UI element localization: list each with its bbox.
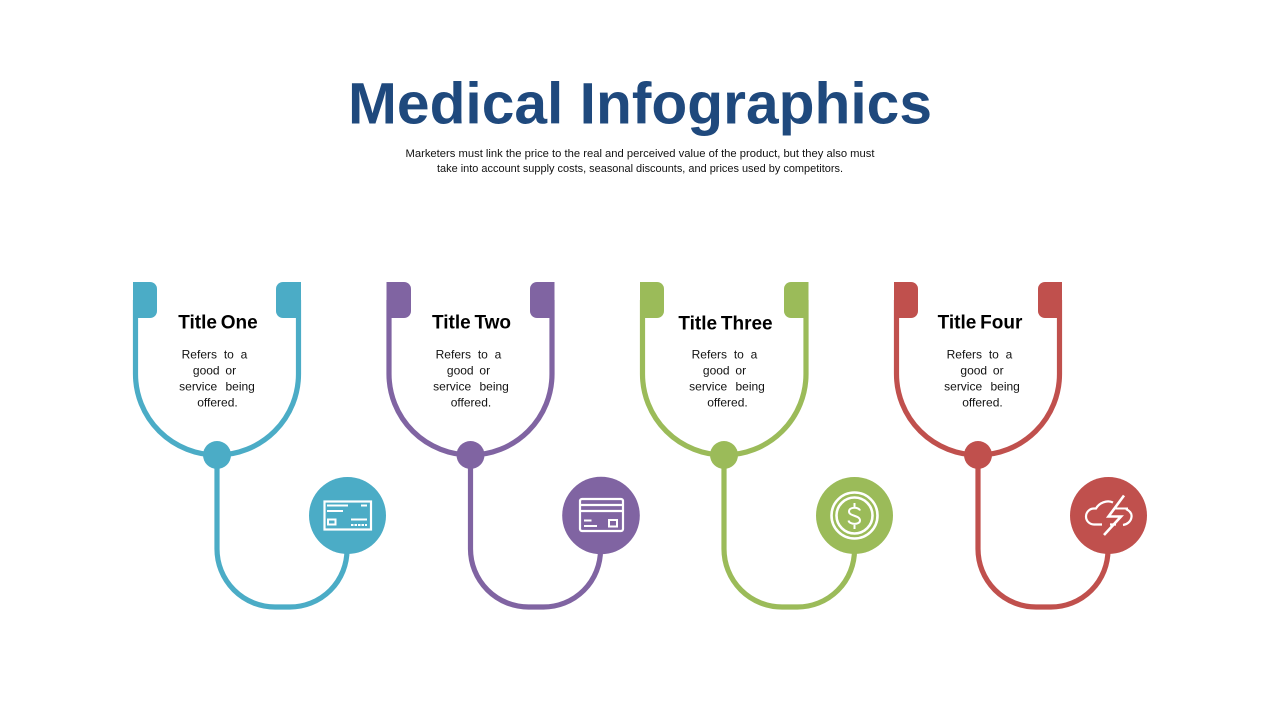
icon: dollar coin (832, 492, 878, 538)
heading: title two: Title Two (432, 312, 511, 334)
subtitle text (406, 148, 875, 175)
heading: title three: Title Three (678, 314, 773, 334)
subtitle text: Marketers must link the price to the real and perceived value of the product, but they also must (406, 148, 875, 160)
text block: title four (944, 348, 1020, 410)
text block: title three (689, 348, 765, 410)
text block: title two: Refers to a (436, 348, 502, 362)
panel: title one (133, 282, 386, 607)
icon: bank card (324, 502, 371, 530)
icon: credit card (580, 499, 623, 531)
panel: title three (640, 282, 893, 607)
heading: title four: Title Four (938, 312, 1023, 334)
text block: title one (179, 348, 255, 410)
stethoscope: purple (386, 282, 640, 607)
text block: title four: offered. (962, 396, 1003, 410)
stethoscope: red (894, 282, 1147, 607)
text block: title one: service being (179, 380, 255, 394)
text block: title one: Refers to a (182, 348, 248, 362)
text block: title four: good or (960, 364, 1004, 378)
text block: title two (433, 348, 509, 410)
panel: title two (386, 282, 640, 607)
title: Medical Infographics (348, 72, 932, 136)
text block: title two: good or (447, 364, 490, 378)
text block: title two: service being (433, 380, 509, 394)
icon: cloud with lightning (1086, 496, 1132, 535)
text block: title three: offered. (707, 396, 748, 410)
heading: title one: Title One (178, 312, 258, 334)
stethoscope: green (640, 282, 893, 607)
subtitle text: take into account supply costs, seasonal discounts, and prices used by competitors. (437, 163, 843, 175)
text block: title two: offered. (451, 396, 491, 410)
panel: title four (894, 282, 1147, 607)
text block: title three: good or (703, 364, 746, 378)
text block: title three: Refers to a (692, 348, 758, 362)
text block: title three: service being (689, 380, 765, 394)
text block: title four: service being (944, 380, 1020, 394)
text block: title one: good or (193, 364, 236, 378)
stethoscope: blue (133, 282, 386, 607)
text block: title one: offered. (197, 396, 238, 410)
text block: title four: Refers to a (947, 348, 1013, 362)
